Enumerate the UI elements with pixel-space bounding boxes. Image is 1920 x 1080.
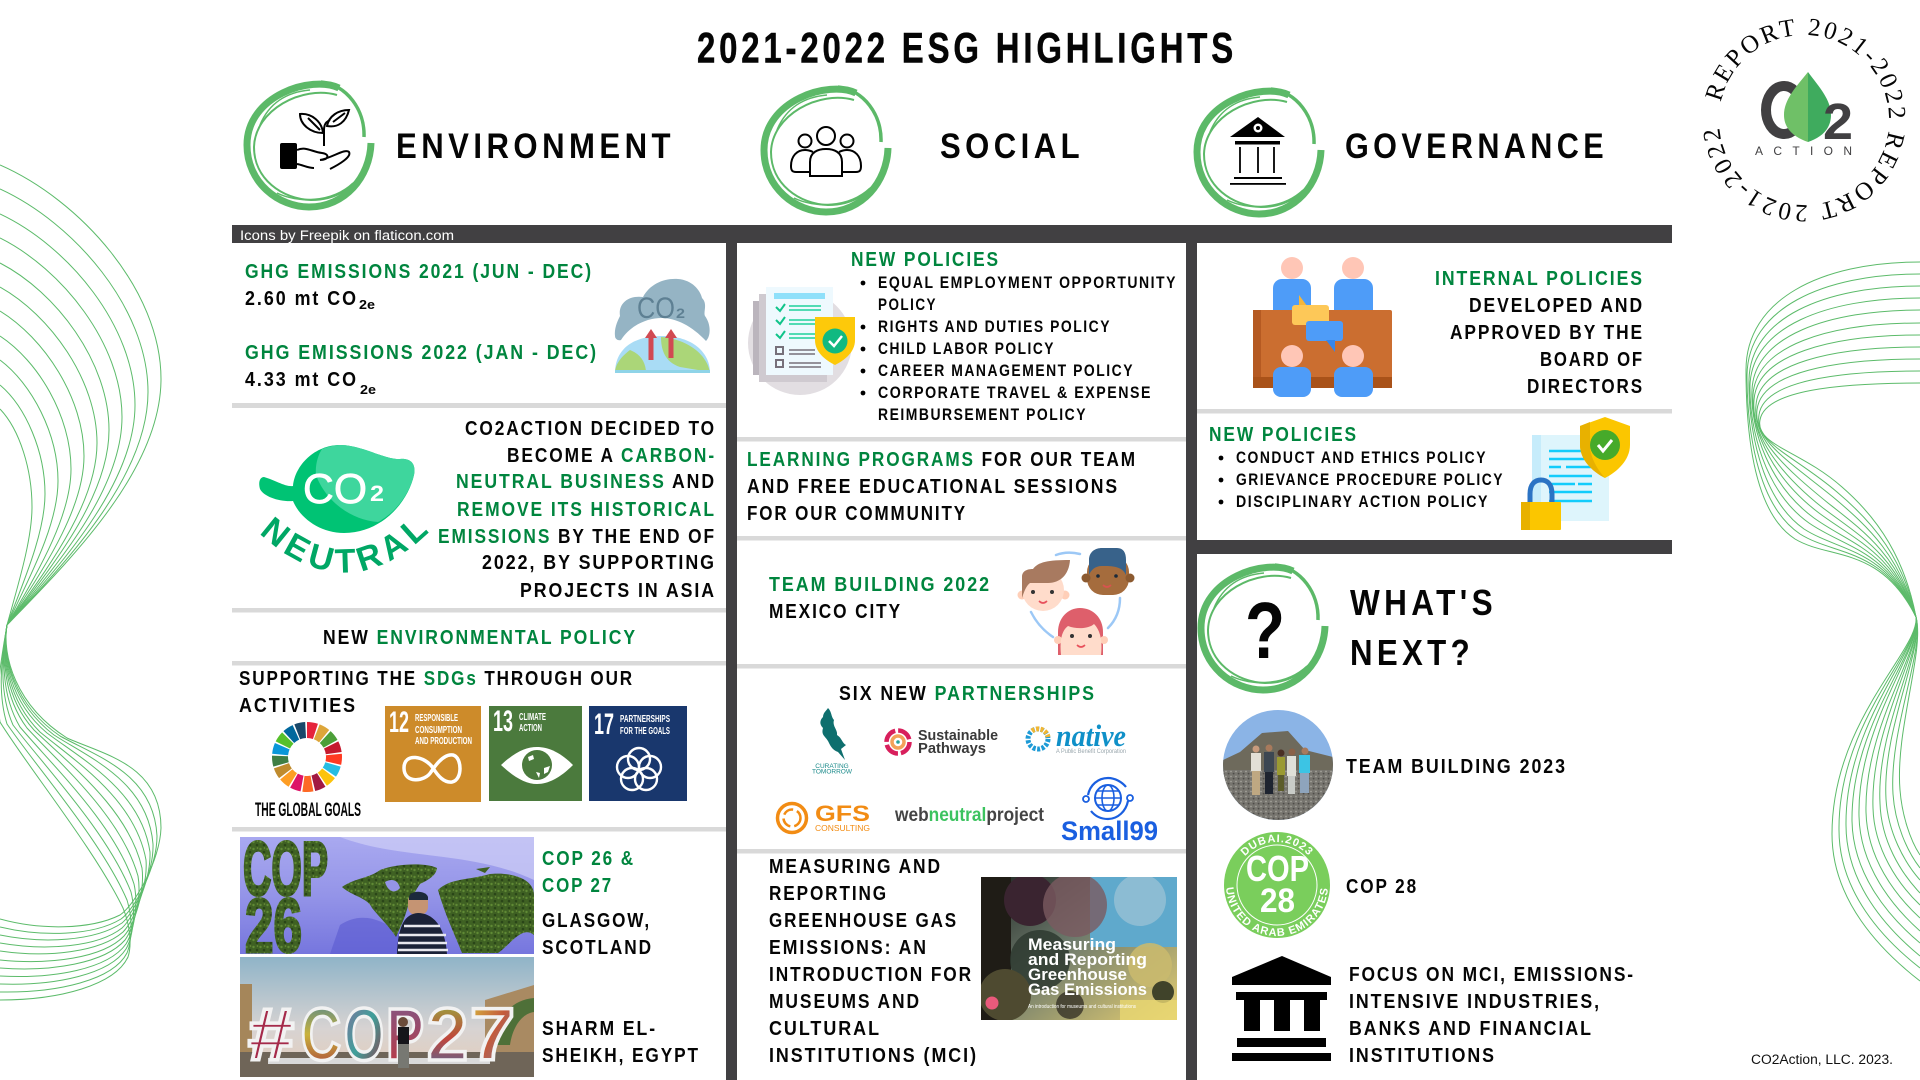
policy list: RIGHTS AND DUTIES POLICY xyxy=(878,318,1111,336)
heading: ENVIRONMENT xyxy=(396,127,675,166)
policy list: CONDUCT AND ETHICS POLICY xyxy=(1236,449,1487,467)
team building text: TEAM BUILDING 2022 xyxy=(769,574,991,596)
badge: COP 28: 28 xyxy=(1260,882,1295,920)
section header: environment xyxy=(247,82,675,207)
icon: document with shield and lock xyxy=(1521,417,1630,530)
publication cover: Greenhouse xyxy=(1028,965,1127,984)
team building 2023: TEAM BUILDING 2023 xyxy=(1346,756,1567,778)
COP heading: COP 27 xyxy=(542,875,613,897)
SDG tile 13: ACTION xyxy=(519,723,542,734)
decorative swirl: left xyxy=(0,165,161,1000)
publication title: REPORTING xyxy=(769,883,888,905)
panel: internal policies xyxy=(1253,257,1644,398)
SDG heading: SUPPORTING THE SDGs THROUGH OUR xyxy=(239,668,634,690)
GHG 2021 value: 2.60 mt CO xyxy=(245,288,358,310)
panel: SDGs xyxy=(239,668,687,821)
logo: native: native xyxy=(1056,718,1126,753)
panel: COP 26 and COP 27 xyxy=(240,827,700,1077)
panel: what's next xyxy=(1198,563,1635,1067)
COP heading: COP 26 & xyxy=(542,848,635,870)
icon credit: Icons by Freepik on flaticon.com xyxy=(240,228,454,243)
SDG tile 13: 13 xyxy=(493,705,513,738)
COP 27 location: SHARM EL- xyxy=(542,1018,657,1040)
panel: partnerships xyxy=(778,683,1158,846)
section header: governance xyxy=(1197,89,1608,214)
focus text xyxy=(1349,964,1635,1067)
SDG tile 12: AND PRODUCTION xyxy=(415,736,472,747)
icon: three faces xyxy=(1018,548,1134,655)
policy list xyxy=(1219,449,1504,511)
commitment text: CO2ACTION DECIDED TO xyxy=(465,418,716,440)
GHG 2022 value: 4.33 mt CO xyxy=(245,369,358,391)
SDG tile 12: CONSUMPTION xyxy=(415,725,462,736)
SDG heading: ACTIVITIES xyxy=(239,695,357,717)
commitment text: REMOVE ITS HISTORICAL xyxy=(457,499,716,521)
photo: COP 27: C xyxy=(301,993,341,1076)
COP 28 text: COP 28 xyxy=(1346,876,1418,898)
GHG 2021 label: GHG EMISSIONS 2021 (JUN - DEC) xyxy=(245,261,593,283)
photo: COP 27: # xyxy=(248,993,294,1076)
logo: GFS Consulting: CONSULTING xyxy=(815,824,870,833)
icon: question mark: ? xyxy=(1245,586,1285,675)
COP 26 location xyxy=(542,910,653,959)
commitment text: 2022, BY SUPPORTING xyxy=(482,552,716,574)
logo 2: 2 xyxy=(1823,93,1853,150)
policy list: CHILD LABOR POLICY xyxy=(878,340,1055,358)
commitment text: EMISSIONS BY THE END OF xyxy=(438,526,716,548)
heading: SOCIAL xyxy=(940,127,1084,166)
section header: social xyxy=(764,87,1084,212)
logo: native xyxy=(1028,718,1126,755)
logo: GFS Consulting xyxy=(778,801,870,833)
logo: Sustainable Pathways: Sustainable xyxy=(918,727,998,744)
publication title: GREENHOUSE GAS xyxy=(769,910,958,932)
photo: COP 26 xyxy=(240,837,534,954)
publication title: CULTURAL xyxy=(769,1018,881,1040)
commitment text: NEUTRAL BUSINESS AND xyxy=(456,471,716,493)
panel: new governance policies xyxy=(1209,417,1630,530)
logo: native: A Public Benefit Corporation xyxy=(1056,749,1126,755)
icon: temple xyxy=(1197,89,1321,214)
publication title xyxy=(769,856,978,1067)
COP 26 location: SCOTLAND xyxy=(542,937,653,959)
panel: new social policies xyxy=(748,249,1177,424)
copyright: CO2Action, LLC. 2023. xyxy=(1751,1052,1893,1067)
photo: COP 27: P xyxy=(386,993,424,1076)
publication title: INSTITUTIONS (MCI) xyxy=(769,1045,978,1067)
learning programs text: FOR OUR COMMUNITY xyxy=(747,503,967,525)
panel: governance column xyxy=(1198,257,1644,1067)
learning programs text: AND FREE EDUCATIONAL SESSIONS xyxy=(747,476,1119,498)
logo: Curating Tomorrow: CURATING xyxy=(815,763,849,770)
publication cover: Measuring xyxy=(1028,935,1116,954)
photo: COP 26: 26 xyxy=(245,884,302,969)
team building text: MEXICO CITY xyxy=(769,601,902,623)
COP 27 location: SHEIKH, EGYPT xyxy=(542,1045,700,1067)
internal policies text: APPROVED BY THE xyxy=(1450,322,1644,344)
publication title: EMISSIONS: AN xyxy=(769,937,928,959)
GHG 2022 value: 2e xyxy=(360,382,376,397)
internal policies text: INTERNAL POLICIES xyxy=(1435,268,1644,290)
policy list: CORPORATE TRAVEL & EXPENSE xyxy=(878,384,1152,402)
SDG tile 17 xyxy=(589,706,687,801)
publication title: MUSEUMS AND xyxy=(769,991,921,1013)
publication cover: Gas Emissions xyxy=(1028,980,1147,999)
panel: environment column xyxy=(239,261,716,1077)
badge: COP 28 xyxy=(1224,832,1330,938)
icon: question mark xyxy=(1201,565,1325,690)
photo: COP 26: COP xyxy=(243,827,328,912)
icon: board meeting xyxy=(1253,257,1392,397)
icon: three people xyxy=(764,87,888,212)
SDG tile 17: PARTNERSHIPS xyxy=(620,714,670,725)
SDG tile 13 xyxy=(489,705,582,801)
policy list: CAREER MANAGEMENT POLICY xyxy=(878,362,1134,380)
publication cover: and Reporting xyxy=(1028,950,1147,969)
GHG 2022 label: GHG EMISSIONS 2022 (JAN - DEC) xyxy=(245,342,598,364)
policy list xyxy=(861,274,1177,424)
focus text: FOCUS ON MCI, EMISSIONS- xyxy=(1349,964,1635,986)
subheading: NEW POLICIES xyxy=(851,249,1000,271)
logo wordmark: ACTION xyxy=(1755,144,1852,158)
publication cover: An introduction for museums and cultural institutions xyxy=(1028,1004,1136,1010)
photo: COP 27: 7 xyxy=(470,993,515,1076)
learning programs text: LEARNING PROGRAMS FOR OUR TEAM xyxy=(747,449,1137,471)
icon: global goals wheel xyxy=(255,719,361,821)
badge: COP 28: COP xyxy=(1246,848,1309,889)
team building text xyxy=(769,574,991,623)
heading: GOVERNANCE xyxy=(1345,127,1608,166)
SDG tile 12: RESPONSIBLE xyxy=(415,713,458,724)
panel: social column xyxy=(747,249,1177,1067)
logo: Curating Tomorrow xyxy=(812,708,853,776)
panel: GHG emissions xyxy=(245,261,710,397)
SDG tile 12: 12 xyxy=(389,706,409,739)
COP 27 location xyxy=(542,1018,700,1067)
icon: CO2 neutral leaf: 2 xyxy=(370,481,384,506)
icon: CO2 cloud over planet: 2 xyxy=(676,305,685,321)
badge: COP 28: UNITED ARAB EMIRATES xyxy=(1226,887,1328,936)
policy list: REIMBURSEMENT POLICY xyxy=(878,406,1087,424)
circular report text: REPORT 2021-2022 REPORT 2021-2022 xyxy=(1704,18,1906,222)
learning programs text xyxy=(747,449,1137,525)
new environmental policy: NEW ENVIRONMENTAL POLICY xyxy=(323,627,637,649)
internal policies text xyxy=(1435,268,1644,398)
photo: COP 27: O xyxy=(344,993,384,1076)
photo: team at pyramid xyxy=(1223,710,1333,822)
COP 26 location: GLASGOW, xyxy=(542,910,651,932)
heading: WHAT'S xyxy=(1350,582,1497,623)
logo: Curating Tomorrow: TOMORROW xyxy=(812,768,853,776)
logo leaf xyxy=(1784,72,1831,142)
icon: hand with seedling xyxy=(247,82,371,207)
SDG tile 17: 17 xyxy=(594,708,614,741)
photo: COP 27 xyxy=(240,957,534,1077)
publication title: MEASURING AND xyxy=(769,856,942,878)
logo C xyxy=(1766,86,1795,134)
policy list: DISCIPLINARY ACTION POLICY xyxy=(1236,493,1489,511)
icon: CO2 neutral leaf: NEUTRAL xyxy=(260,516,429,573)
heading: NEXT? xyxy=(1350,632,1474,673)
subheading: NEW POLICIES xyxy=(1209,424,1358,446)
decorative swirl: right xyxy=(1746,262,1920,981)
icon: checklist with shield xyxy=(748,287,855,395)
commitment text xyxy=(438,418,716,602)
publication cover xyxy=(979,873,1177,1021)
panel: team building 2022 xyxy=(769,548,1134,655)
SDG heading xyxy=(239,668,634,717)
logo: GFS Consulting: GFS xyxy=(815,801,870,826)
title: 2021-2022 ESG HIGHLIGHTS xyxy=(697,24,1237,72)
partnerships heading: SIX NEW PARTNERSHIPS xyxy=(839,683,1096,705)
header bar xyxy=(232,225,1672,243)
publication title: INTRODUCTION FOR xyxy=(769,964,973,986)
policy list: POLICY xyxy=(878,296,937,314)
policy list: GRIEVANCE PROCEDURE POLICY xyxy=(1236,471,1504,489)
icon: CO2 cloud over planet xyxy=(615,279,710,373)
logo: Small99 xyxy=(1061,778,1158,846)
SDG tile 13: CLIMATE xyxy=(519,712,546,723)
panel: CO2 neutral commitment xyxy=(259,418,716,602)
commitment text: BECOME A CARBON- xyxy=(507,445,716,467)
icon: CO2 neutral leaf xyxy=(259,445,429,573)
heading xyxy=(1350,582,1497,673)
icon: CO2 neutral leaf: CO xyxy=(303,465,367,512)
policy list: EQUAL EMPLOYMENT OPPORTUNITY xyxy=(878,274,1177,292)
logo: Sustainable Pathways: Pathways xyxy=(918,740,986,757)
GHG 2021 value: 2e xyxy=(359,297,375,312)
internal policies text: DIRECTORS xyxy=(1527,376,1644,398)
SDG tile 12 xyxy=(385,706,481,802)
panel: MCI publication xyxy=(769,856,1177,1067)
logo: CO2 Action report seal xyxy=(1704,18,1906,222)
focus text: BANKS AND FINANCIAL xyxy=(1349,1018,1593,1040)
badge: COP 28: DUBAI.2023 xyxy=(1240,834,1313,856)
internal policies text: DEVELOPED AND xyxy=(1469,295,1644,317)
internal policies text: BOARD OF xyxy=(1540,349,1644,371)
logo: Sustainable Pathways xyxy=(886,727,998,757)
icon: institution building xyxy=(1232,956,1331,1061)
icon: global goals wheel: THE GLOBAL GOALS xyxy=(255,800,361,821)
SDG tile 17: FOR THE GOALS xyxy=(620,726,670,737)
focus text: INSTITUTIONS xyxy=(1349,1045,1496,1067)
commitment text: PROJECTS IN ASIA xyxy=(520,580,716,602)
logo: Small99: Small99 xyxy=(1061,816,1158,846)
photo: COP 27: 2 xyxy=(427,993,468,1076)
icon: CO2 cloud over planet: CO xyxy=(637,292,675,325)
logo: webneutralproject: webneutralproject xyxy=(894,805,1045,826)
COP heading xyxy=(542,848,635,897)
focus text: INTENSIVE INDUSTRIES, xyxy=(1349,991,1601,1013)
